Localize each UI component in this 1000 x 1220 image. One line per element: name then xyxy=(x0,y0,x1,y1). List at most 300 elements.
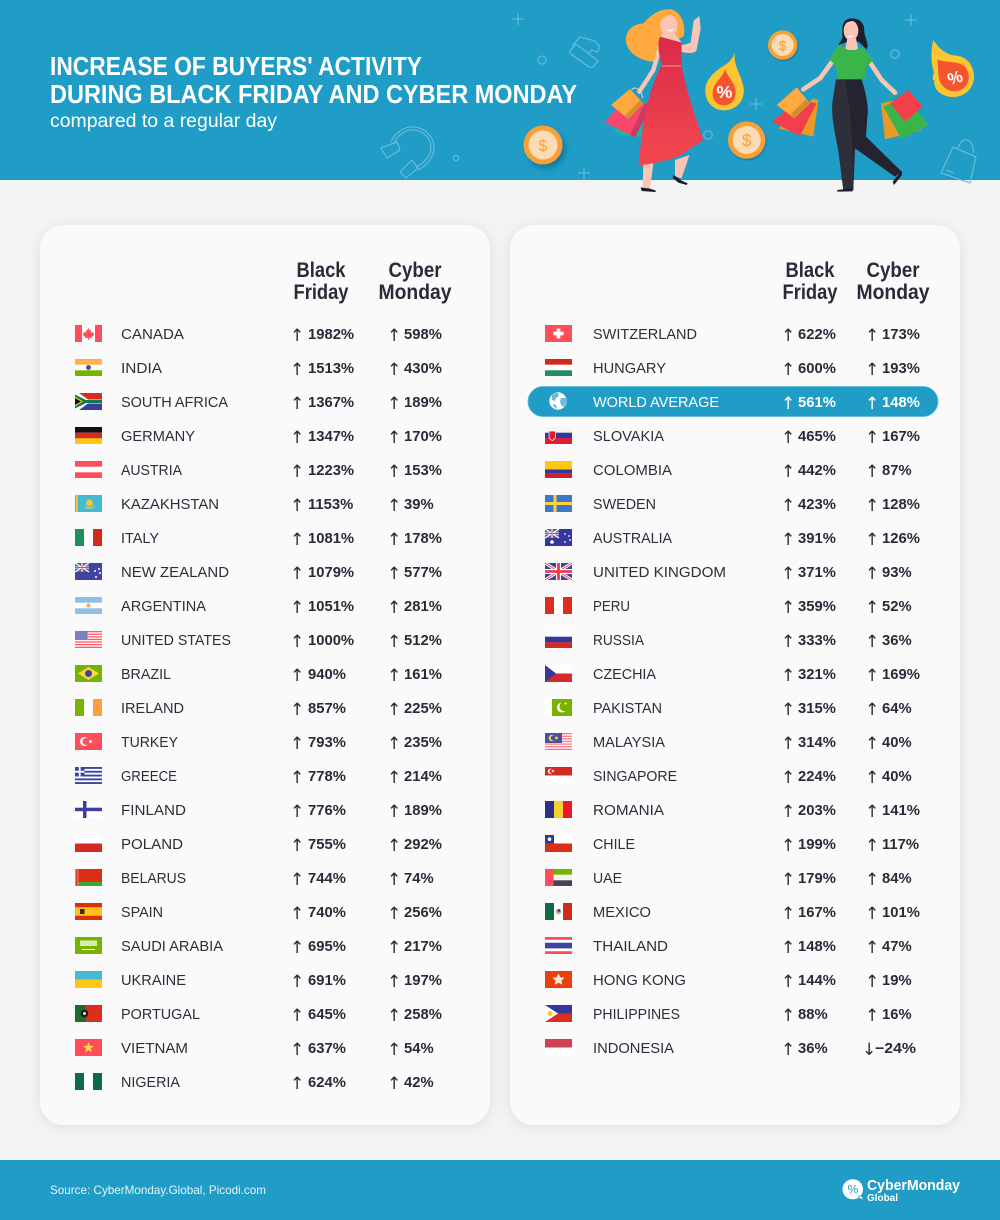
row: India: ↑ xyxy=(387,360,401,380)
row: Kazakhstan: KAZAKHSTAN xyxy=(121,496,219,513)
flag: Brazil xyxy=(75,665,102,682)
flag: Austria xyxy=(75,461,102,478)
flag: Saudi Arabia xyxy=(75,937,102,954)
row: United States: UNITED STATES xyxy=(121,632,231,649)
row: Vietnam: 637% xyxy=(308,1041,346,1057)
row: Indonesia: ↑ xyxy=(781,1040,795,1060)
row: Hungary: HUNGARY xyxy=(593,360,666,377)
footer band xyxy=(0,1160,1000,1220)
row: India xyxy=(75,359,442,380)
row: Slovakia: ↑ xyxy=(781,428,795,448)
heading: right black friday xyxy=(782,259,838,304)
row: Ukraine: 691% xyxy=(308,973,346,989)
row: Philippines: ↑ xyxy=(865,1006,879,1026)
flag: India xyxy=(75,359,102,376)
heading: left black friday: Black xyxy=(296,259,346,282)
flag: Indonesia xyxy=(545,1039,572,1056)
row: Nigeria: ↑ xyxy=(290,1074,304,1094)
heading: right cyber monday: Cyber xyxy=(866,259,920,282)
row: Germany xyxy=(75,427,442,448)
icon: coin top: $ xyxy=(779,37,787,53)
row: Brazil: 161% xyxy=(404,667,442,683)
row: Mexico xyxy=(545,903,920,924)
row: Hong Kong: HONG KONG xyxy=(593,972,686,989)
flag: UAE xyxy=(545,869,572,886)
row: Greece: ↑ xyxy=(290,768,304,788)
row: Switzerland: ↑ xyxy=(865,326,879,346)
row: Hong Kong xyxy=(545,971,912,992)
row: Spain: ↑ xyxy=(290,904,304,924)
row: Colombia: ↑ xyxy=(781,462,795,482)
row: South Africa: 189% xyxy=(404,395,442,411)
heading: left cyber monday: Cyber xyxy=(388,259,442,282)
row: Thailand: 47% xyxy=(882,939,912,955)
flag: Hungary xyxy=(545,359,572,376)
row: Saudi Arabia: ↑ xyxy=(290,938,304,958)
row: Spain: 256% xyxy=(404,905,442,921)
row: Malaysia xyxy=(545,733,912,754)
icon: small coin left: $ xyxy=(539,138,548,155)
row: Nigeria: 624% xyxy=(308,1075,346,1091)
row: Finland: 189% xyxy=(404,803,442,819)
highlighted row: World Average: 148% xyxy=(882,395,920,411)
row: Argentina: 281% xyxy=(404,599,442,615)
highlighted row: World Average xyxy=(528,386,938,416)
flag: Spain xyxy=(75,903,102,920)
row: Singapore xyxy=(545,767,912,788)
flag: Turkey xyxy=(75,733,102,750)
row: Finland: FINLAND xyxy=(121,802,186,819)
flag: United States xyxy=(75,631,102,648)
row: Colombia xyxy=(545,461,912,482)
icon: globe xyxy=(549,392,567,410)
row: Romania: ROMANIA xyxy=(593,802,664,819)
row: Chile: 117% xyxy=(882,837,919,853)
flag: Czechia xyxy=(545,665,572,682)
row: Spain: ↑ xyxy=(387,904,401,924)
row: Turkey: TURKEY xyxy=(121,734,178,751)
flag: Finland xyxy=(75,801,102,818)
row: Vietnam xyxy=(75,1039,434,1060)
row: Sweden: 423% xyxy=(798,497,836,513)
flag: Portugal xyxy=(75,1005,102,1022)
row: Belarus: 74% xyxy=(404,871,434,887)
row: Indonesia: INDONESIA xyxy=(593,1040,674,1057)
flag: Hong Kong xyxy=(545,971,572,988)
row: Ireland: IRELAND xyxy=(121,700,184,717)
woman in green top xyxy=(772,18,928,192)
row: Saudi Arabia: SAUDI ARABIA xyxy=(121,938,223,955)
icon: coin bottom: $ xyxy=(742,131,752,151)
row: New Zealand xyxy=(75,563,442,584)
row: Nigeria: NIGERIA xyxy=(121,1074,180,1091)
row: Italy: ↑ xyxy=(387,530,401,550)
row: Belarus: ↑ xyxy=(387,870,401,890)
row: Belarus: ↑ xyxy=(290,870,304,890)
row: Czechia: ↑ xyxy=(781,666,795,686)
row: New Zealand: 577% xyxy=(404,565,442,581)
woman in red dress xyxy=(605,9,703,192)
row: Poland xyxy=(75,835,442,856)
row: Australia: 126% xyxy=(882,531,920,547)
row: Peru xyxy=(545,597,912,618)
icon: coin top xyxy=(768,30,797,60)
row: Australia xyxy=(545,529,920,550)
row: Germany: 170% xyxy=(404,429,442,445)
row: Italy xyxy=(75,529,442,550)
row: Sweden: ↑ xyxy=(865,496,879,516)
row: UAE xyxy=(545,869,912,890)
row: Hong Kong: 144% xyxy=(798,973,836,989)
heading: left black friday xyxy=(294,259,349,304)
row: Poland: ↑ xyxy=(387,836,401,856)
row: United Kingdom: 371% xyxy=(798,565,836,581)
panel: left table xyxy=(40,225,490,1125)
row: India: ↑ xyxy=(290,360,304,380)
row: Romania: ↑ xyxy=(781,802,795,822)
icon: small coin left xyxy=(524,126,562,164)
flag: Vietnam xyxy=(75,1039,102,1056)
row: Colombia: 442% xyxy=(798,463,836,479)
flag: Kazakhstan xyxy=(75,495,102,512)
heading: left cyber monday: Monday xyxy=(378,281,452,304)
row: United States: 1000% xyxy=(308,633,354,649)
row: Hungary: 600% xyxy=(798,361,836,377)
row: Peru: 52% xyxy=(882,599,912,615)
row: Czechia: 321% xyxy=(798,667,836,683)
title line 1: INCREASE OF BUYERS' ACTIVITY xyxy=(50,51,422,81)
row: Russia: ↑ xyxy=(781,632,795,652)
row: Turkey: 793% xyxy=(308,735,346,751)
flag: Russia xyxy=(545,631,572,648)
highlighted row: World Average: ↑ xyxy=(781,394,795,414)
row: Thailand xyxy=(545,937,912,958)
row: UAE: UAE xyxy=(593,870,622,887)
row: New Zealand: ↑ xyxy=(387,564,401,584)
row: United States xyxy=(75,631,442,652)
row: Canada: CANADA xyxy=(121,326,184,343)
row: Ukraine xyxy=(75,971,442,992)
flag: Colombia xyxy=(545,461,572,478)
row: Slovakia: 465% xyxy=(798,429,836,445)
row: Ireland: ↑ xyxy=(387,700,401,720)
flag: Greece xyxy=(75,767,102,784)
flag: Philippines xyxy=(545,1005,572,1022)
icon: discount flame centre: % xyxy=(716,82,732,102)
title line 2: DURING BLACK FRIDAY AND CYBER MONDAY xyxy=(50,79,577,109)
row: Hong Kong: ↑ xyxy=(781,972,795,992)
title block xyxy=(50,51,577,132)
row: Chile: ↑ xyxy=(781,836,795,856)
logo: CyberMonday Global: % xyxy=(848,1182,859,1196)
row: Singapore: ↑ xyxy=(865,768,879,788)
row: Romania: 141% xyxy=(882,803,920,819)
row: New Zealand: 1079% xyxy=(308,565,354,581)
row: Brazil: ↑ xyxy=(387,666,401,686)
flag: Malaysia xyxy=(545,733,572,750)
row: Saudi Arabia xyxy=(75,937,442,958)
row: Kazakhstan: 39% xyxy=(404,497,434,513)
logo: CyberMonday Global xyxy=(842,1177,961,1204)
row: Brazil xyxy=(75,665,442,686)
row: South Africa: 1367% xyxy=(308,395,354,411)
flag: South Africa xyxy=(75,393,102,410)
row: United States: ↑ xyxy=(290,632,304,652)
row: Poland: 755% xyxy=(308,837,346,853)
row: Finland: ↑ xyxy=(387,802,401,822)
row: Thailand: 148% xyxy=(798,939,836,955)
flag: Nigeria xyxy=(75,1073,102,1090)
row: India: INDIA xyxy=(121,360,162,377)
row: Malaysia: MALAYSIA xyxy=(593,734,665,751)
flag: Switzerland xyxy=(545,325,572,342)
row: Russia: RUSSIA xyxy=(593,632,644,649)
row: Kazakhstan: ↑ xyxy=(290,496,304,516)
row: Germany: 1347% xyxy=(308,429,354,445)
header band xyxy=(0,0,1000,180)
row: Poland: 292% xyxy=(404,837,442,853)
row: Poland: POLAND xyxy=(121,836,183,853)
row: United Kingdom: ↑ xyxy=(865,564,879,584)
row: South Africa: ↑ xyxy=(290,394,304,414)
row: Slovakia: 167% xyxy=(882,429,920,445)
row: Portugal: 258% xyxy=(404,1007,442,1023)
row: Kazakhstan xyxy=(75,495,434,516)
row: Ukraine: ↑ xyxy=(290,972,304,992)
heading: left cyber monday xyxy=(378,259,452,304)
row: Malaysia: 314% xyxy=(798,735,836,751)
row: Singapore: SINGAPORE xyxy=(593,768,677,785)
row: Mexico: MEXICO xyxy=(593,904,651,921)
row: Germany: ↑ xyxy=(387,428,401,448)
row: Russia: 36% xyxy=(882,633,912,649)
row: Ireland: 225% xyxy=(404,701,442,717)
row: UAE: 84% xyxy=(882,871,912,887)
row: United States: ↑ xyxy=(387,632,401,652)
row: Greece: GREECE xyxy=(121,768,177,785)
row: Italy: 178% xyxy=(404,531,442,547)
row: Colombia: 87% xyxy=(882,463,912,479)
flag: Poland xyxy=(75,835,102,852)
row: Slovakia: SLOVAKIA xyxy=(593,428,664,445)
row: Mexico: 101% xyxy=(882,905,920,921)
heading: right cyber monday: Monday xyxy=(856,281,930,304)
row: Ukraine: UKRAINE xyxy=(121,972,186,989)
row: New Zealand: ↑ xyxy=(290,564,304,584)
row: Austria: 1223% xyxy=(308,463,354,479)
row: Thailand: THAILAND xyxy=(593,938,668,955)
row: Czechia: CZECHIA xyxy=(593,666,656,683)
row: Vietnam: ↑ xyxy=(290,1040,304,1060)
row: Slovakia xyxy=(545,427,920,448)
row: Switzerland: SWITZERLAND xyxy=(593,326,697,343)
flag: Italy xyxy=(75,529,102,546)
flag: United Kingdom xyxy=(545,563,572,580)
highlighted row: World Average: WORLD AVERAGE xyxy=(593,394,719,411)
flag: Mexico xyxy=(545,903,572,920)
row: Czechia xyxy=(545,665,920,686)
row: South Africa xyxy=(75,393,442,414)
row: South Africa: SOUTH AFRICA xyxy=(121,394,228,411)
logo: CyberMonday Global: CyberMonday xyxy=(867,1177,961,1194)
row: Colombia: COLOMBIA xyxy=(593,462,672,479)
row: Australia: 391% xyxy=(798,531,836,547)
heading: left black friday: Friday xyxy=(294,281,349,304)
logo: CyberMonday Global: Global xyxy=(867,1193,898,1204)
row: Pakistan: 315% xyxy=(798,701,836,717)
row: Canada: ↑ xyxy=(290,326,304,346)
row: Slovakia: ↑ xyxy=(865,428,879,448)
row: Chile: CHILE xyxy=(593,836,635,853)
row: Portugal: PORTUGAL xyxy=(121,1006,200,1023)
row: Spain: 740% xyxy=(308,905,346,921)
row: Peru: PERU xyxy=(593,598,630,615)
row: Italy: 1081% xyxy=(308,531,354,547)
row: Singapore: ↑ xyxy=(781,768,795,788)
row: Vietnam: ↑ xyxy=(387,1040,401,1060)
row: Peru: ↑ xyxy=(781,598,795,618)
flag: Chile xyxy=(545,835,572,852)
flag: Slovakia xyxy=(545,427,572,444)
row: Vietnam: VIETNAM xyxy=(121,1040,188,1057)
row: Austria xyxy=(75,461,442,482)
row: Saudi Arabia: ↑ xyxy=(387,938,401,958)
row: Belarus: BELARUS xyxy=(121,870,186,887)
row: Ukraine: 197% xyxy=(404,973,442,989)
row: Finland: ↑ xyxy=(290,802,304,822)
row: Belarus xyxy=(75,869,434,890)
row: Switzerland: 622% xyxy=(798,327,836,343)
row: Pakistan xyxy=(545,699,912,720)
row: Brazil: ↑ xyxy=(290,666,304,686)
row: Turkey: ↑ xyxy=(387,734,401,754)
flag: Peru xyxy=(545,597,572,614)
row: Italy: ↑ xyxy=(290,530,304,550)
row: Philippines: PHILIPPINES xyxy=(593,1006,680,1023)
highlighted row: World Average: ↑ xyxy=(865,394,879,414)
row: Malaysia: 40% xyxy=(882,735,912,751)
row: Canada: 598% xyxy=(404,327,442,343)
row: United States: 512% xyxy=(404,633,442,649)
row: Romania: ↑ xyxy=(865,802,879,822)
row: Canada: 1982% xyxy=(308,327,354,343)
row: Canada: ↑ xyxy=(387,326,401,346)
row: Peru: ↑ xyxy=(865,598,879,618)
heading: right cyber monday xyxy=(856,259,930,304)
flag: Australia xyxy=(545,529,572,546)
subtitle: compared to a regular day xyxy=(50,111,278,132)
row: Ukraine: ↑ xyxy=(387,972,401,992)
row: Philippines xyxy=(545,1005,912,1026)
row: Greece: 778% xyxy=(308,769,346,785)
row: Spain xyxy=(75,903,442,924)
row: Kazakhstan: ↑ xyxy=(387,496,401,516)
row: Sweden xyxy=(545,495,920,516)
row: Austria: AUSTRIA xyxy=(121,462,182,479)
row: Germany: ↑ xyxy=(290,428,304,448)
row: Peru: 359% xyxy=(798,599,836,615)
row: Thailand: ↑ xyxy=(781,938,795,958)
row: Germany: GERMANY xyxy=(121,428,195,445)
row: Pakistan: PAKISTAN xyxy=(593,700,662,717)
row: Portugal xyxy=(75,1005,442,1026)
row: Greece: ↑ xyxy=(387,768,401,788)
row: Pakistan: ↑ xyxy=(865,700,879,720)
row: Switzerland xyxy=(545,325,920,346)
row: Mexico: ↑ xyxy=(865,904,879,924)
flag: Canada xyxy=(75,325,102,342)
row: Austria: ↑ xyxy=(387,462,401,482)
row: Philippines: 16% xyxy=(882,1007,912,1023)
row: Portugal: 645% xyxy=(308,1007,346,1023)
row: Argentina: ↑ xyxy=(387,598,401,618)
row: Chile: 199% xyxy=(798,837,836,853)
row: Sweden: 128% xyxy=(882,497,920,513)
row: New Zealand: NEW ZEALAND xyxy=(121,564,229,581)
row: Philippines: ↑ xyxy=(781,1006,795,1026)
row: Greece xyxy=(75,767,442,788)
row: Belarus: 744% xyxy=(308,871,346,887)
row: Austria: 153% xyxy=(404,463,442,479)
flag: Germany xyxy=(75,427,102,444)
row: Romania xyxy=(545,801,920,822)
row: Spain: SPAIN xyxy=(121,904,163,921)
flag: Romania xyxy=(545,801,572,818)
heading: right black friday: Black xyxy=(786,259,835,282)
row: India: 1513% xyxy=(308,361,354,377)
row: Nigeria: 42% xyxy=(404,1075,434,1091)
row: Austria: ↑ xyxy=(290,462,304,482)
row: United Kingdom: ↑ xyxy=(781,564,795,584)
row: Hungary: 193% xyxy=(882,361,920,377)
row: Canada xyxy=(75,325,442,346)
row: Argentina: ↑ xyxy=(290,598,304,618)
row: Brazil: BRAZIL xyxy=(121,666,171,683)
row: Pakistan: ↑ xyxy=(781,700,795,720)
row: Mexico: 167% xyxy=(798,905,836,921)
row: Pakistan: 64% xyxy=(882,701,912,717)
flag: Sweden xyxy=(545,495,572,512)
row: Italy: ITALY xyxy=(121,530,159,547)
row: Poland: ↑ xyxy=(290,836,304,856)
icon: discount flame right: % xyxy=(945,66,965,89)
row: Colombia: ↑ xyxy=(865,462,879,482)
row: Malaysia: ↑ xyxy=(781,734,795,754)
flag: Argentina xyxy=(75,597,102,614)
source note: Source: CyberMonday.Global, Picodi.com xyxy=(50,1183,266,1197)
row: Brazil: 940% xyxy=(308,667,346,683)
icon: coin bottom xyxy=(728,121,765,159)
row: United Kingdom: 93% xyxy=(882,565,912,581)
row: Philippines: 88% xyxy=(798,1007,828,1023)
flag: Ukraine xyxy=(75,971,102,988)
row: Finland xyxy=(75,801,442,822)
row: India: 430% xyxy=(404,361,442,377)
row: Indonesia xyxy=(545,1039,916,1060)
row: Turkey: ↑ xyxy=(290,734,304,754)
row: Australia: ↑ xyxy=(781,530,795,550)
row: Argentina: 1051% xyxy=(308,599,354,615)
flag: Singapore xyxy=(545,767,572,784)
row: Kazakhstan: 1153% xyxy=(308,497,353,513)
row: UAE: ↑ xyxy=(865,870,879,890)
row: Nigeria: ↑ xyxy=(387,1074,401,1094)
row: Thailand: ↑ xyxy=(865,938,879,958)
flag: Pakistan xyxy=(545,699,572,716)
row: Singapore: 224% xyxy=(798,769,836,785)
row: Czechia: ↑ xyxy=(865,666,879,686)
row: UAE: 179% xyxy=(798,871,836,887)
